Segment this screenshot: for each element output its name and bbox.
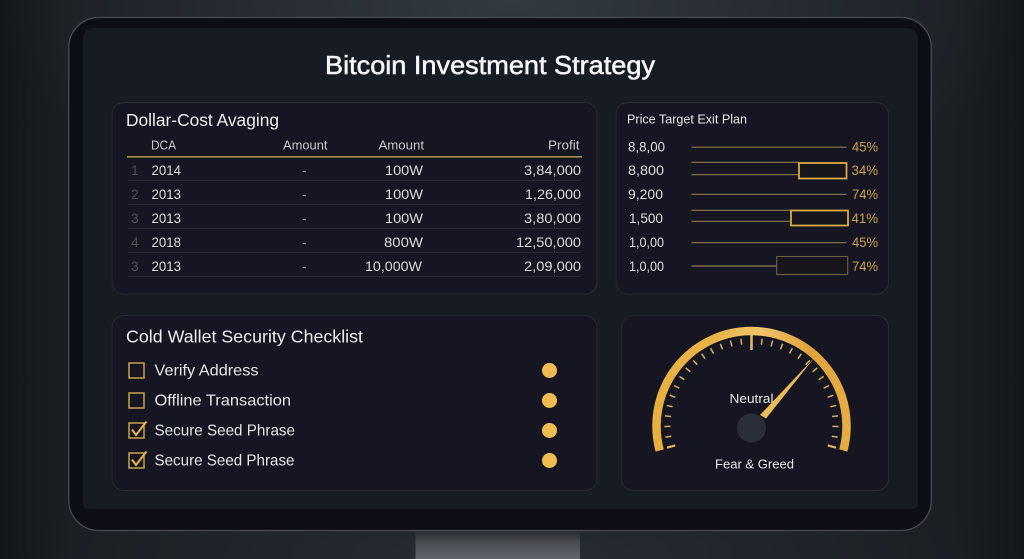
panel heading: Cold Wallet Security Checklist: Cold Wallet Security Checklist: [126, 326, 363, 346]
table rows: -: [302, 234, 307, 250]
checkboxes: [129, 363, 146, 468]
panel: fear and greed gauge: [622, 316, 888, 490]
table rows: 3,84,000: [524, 162, 581, 178]
percent labels: 45%: [852, 138, 878, 154]
table rows: 1: [131, 162, 139, 178]
gauge label: Neutral: Neutral: [730, 391, 774, 406]
table rows: 1,26,000: [525, 186, 581, 202]
gauge ticks: [665, 335, 838, 448]
price labels: [628, 138, 665, 274]
table rows: 4: [131, 234, 139, 250]
price labels: 9,200: [628, 186, 663, 202]
percent labels: 41%: [852, 210, 878, 226]
table rows: 2,09,000: [524, 258, 581, 274]
table header: Amount: [283, 138, 328, 152]
table rows: 2013: [152, 186, 181, 202]
table rows: -: [302, 258, 307, 274]
gauge label: Fear &amp; Greed: Fear & Greed: [715, 456, 794, 472]
gauge hub: [737, 414, 766, 442]
table rows: 2: [131, 186, 139, 202]
gauge arc: [656, 331, 847, 450]
target boxes: [777, 163, 848, 274]
status dots: [542, 363, 557, 468]
table rows: 3: [131, 210, 139, 226]
table rows: 3,80,000: [524, 210, 581, 226]
table header: [151, 138, 580, 152]
price labels: 1,0,00: [629, 234, 664, 250]
percent labels: 74%: [852, 258, 878, 274]
checklist labels: Verify Address: [154, 362, 258, 380]
table header: Profit: [548, 138, 580, 152]
table rows: 2013: [152, 258, 181, 274]
panel heading: Price Target Exit Plan: Price Target Exit Plan: [627, 112, 747, 126]
price labels: 8,800: [628, 162, 664, 178]
table rows: 3: [131, 258, 139, 274]
panel heading: Dollar-Cost Avaging: Dollar-Cost Avaging: [126, 110, 279, 130]
checklist labels: [154, 362, 295, 470]
checklist labels: Secure Seed Phrase: [154, 452, 295, 470]
table rows: 2013: [152, 210, 181, 226]
table rows: 12,50,000: [516, 234, 581, 250]
percent labels: 34%: [852, 162, 878, 178]
table rows: -: [302, 162, 307, 178]
gauge needle: [760, 358, 814, 418]
percent labels: 74%: [852, 186, 878, 202]
table rows: -: [302, 186, 307, 202]
monitor stand: [416, 531, 580, 559]
target lines: [692, 147, 846, 266]
table rows: 10,000W: [365, 258, 423, 274]
table header: DCA: [151, 138, 177, 152]
table header rule: [127, 156, 582, 158]
table rows: 800W: [384, 234, 424, 250]
table rows: 100W: [385, 162, 424, 178]
panel: cold wallet security checklist: [112, 316, 597, 490]
panel: dollar-cost averaging table: [112, 102, 597, 294]
title: Bitcoin Investment Strategy: [325, 50, 655, 80]
checklist labels: Secure Seed Phrase: [154, 422, 295, 440]
table rows: [128, 162, 582, 276]
table rows: 100W: [385, 186, 424, 202]
table rows: 2014: [152, 162, 181, 178]
table header: Amount: [378, 138, 425, 152]
table rows: 2018: [152, 234, 181, 250]
price labels: 1,500: [629, 210, 663, 226]
checklist labels: Offline Transaction: [154, 392, 291, 410]
table rows: -: [302, 210, 307, 226]
screen: [83, 28, 918, 509]
panel: price target exit plan: [616, 102, 888, 294]
table rows: 100W: [385, 210, 424, 226]
percent labels: [852, 138, 878, 274]
price labels: 1,0,00: [629, 258, 664, 274]
monitor: [69, 18, 931, 530]
price labels: 8,8,00: [628, 138, 665, 154]
percent labels: 45%: [852, 234, 878, 250]
